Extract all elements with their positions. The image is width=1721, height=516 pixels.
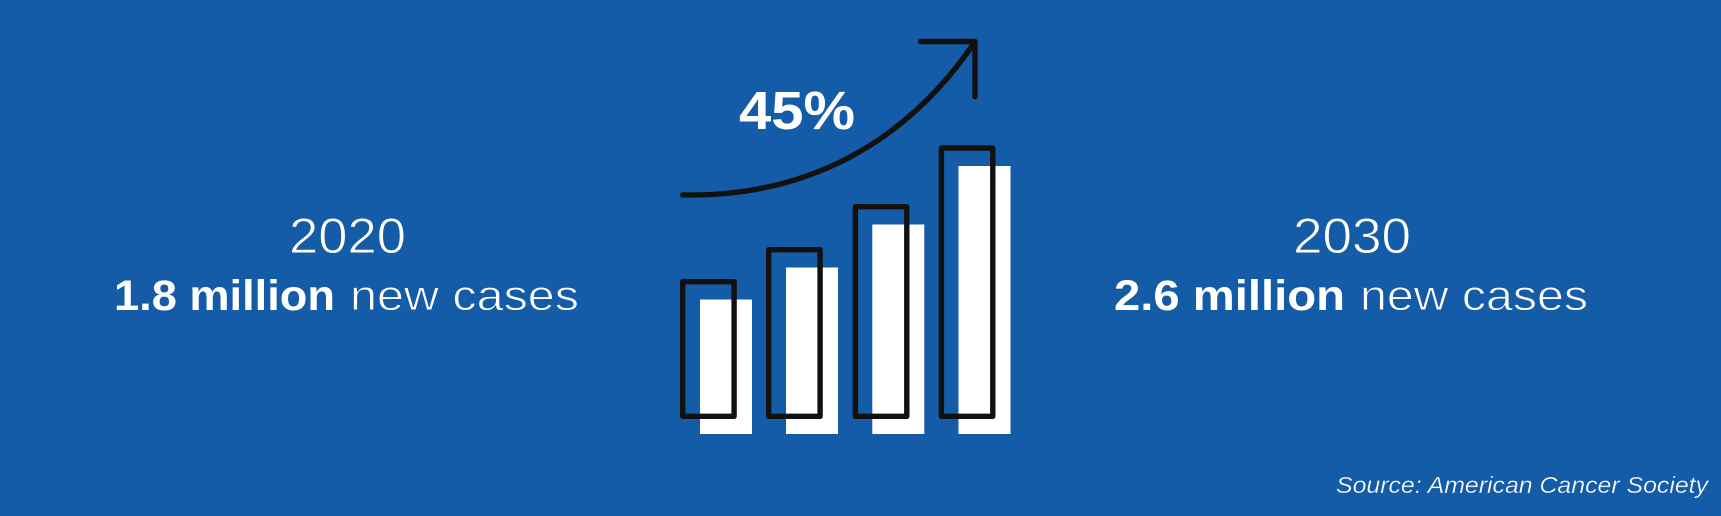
stat: 1.8 million new cases: 1.8 million (114, 272, 335, 320)
stat: 2.6 million new cases: 2.6 million (1114, 272, 1345, 320)
stat: 1.8 million new cases: new cases (350, 272, 579, 320)
text block: 2020 (114, 208, 579, 320)
text block: 2030 (1114, 208, 1588, 320)
source note: Source: American Cancer Society (1336, 472, 1710, 498)
stat: 1.8 million new cases (114, 272, 579, 320)
stat: 2.6 million new cases (1114, 272, 1588, 320)
black outline bars (683, 148, 993, 416)
year: 2020: 2020 (289, 208, 406, 264)
year: 2030: 2030 (1293, 208, 1411, 264)
white bars (700, 166, 1010, 434)
stat: 2.6 million new cases: new cases (1360, 272, 1588, 320)
bar chart (683, 148, 1010, 434)
arrow: growth curve (683, 42, 975, 195)
label: 45%: 45% (739, 81, 855, 141)
